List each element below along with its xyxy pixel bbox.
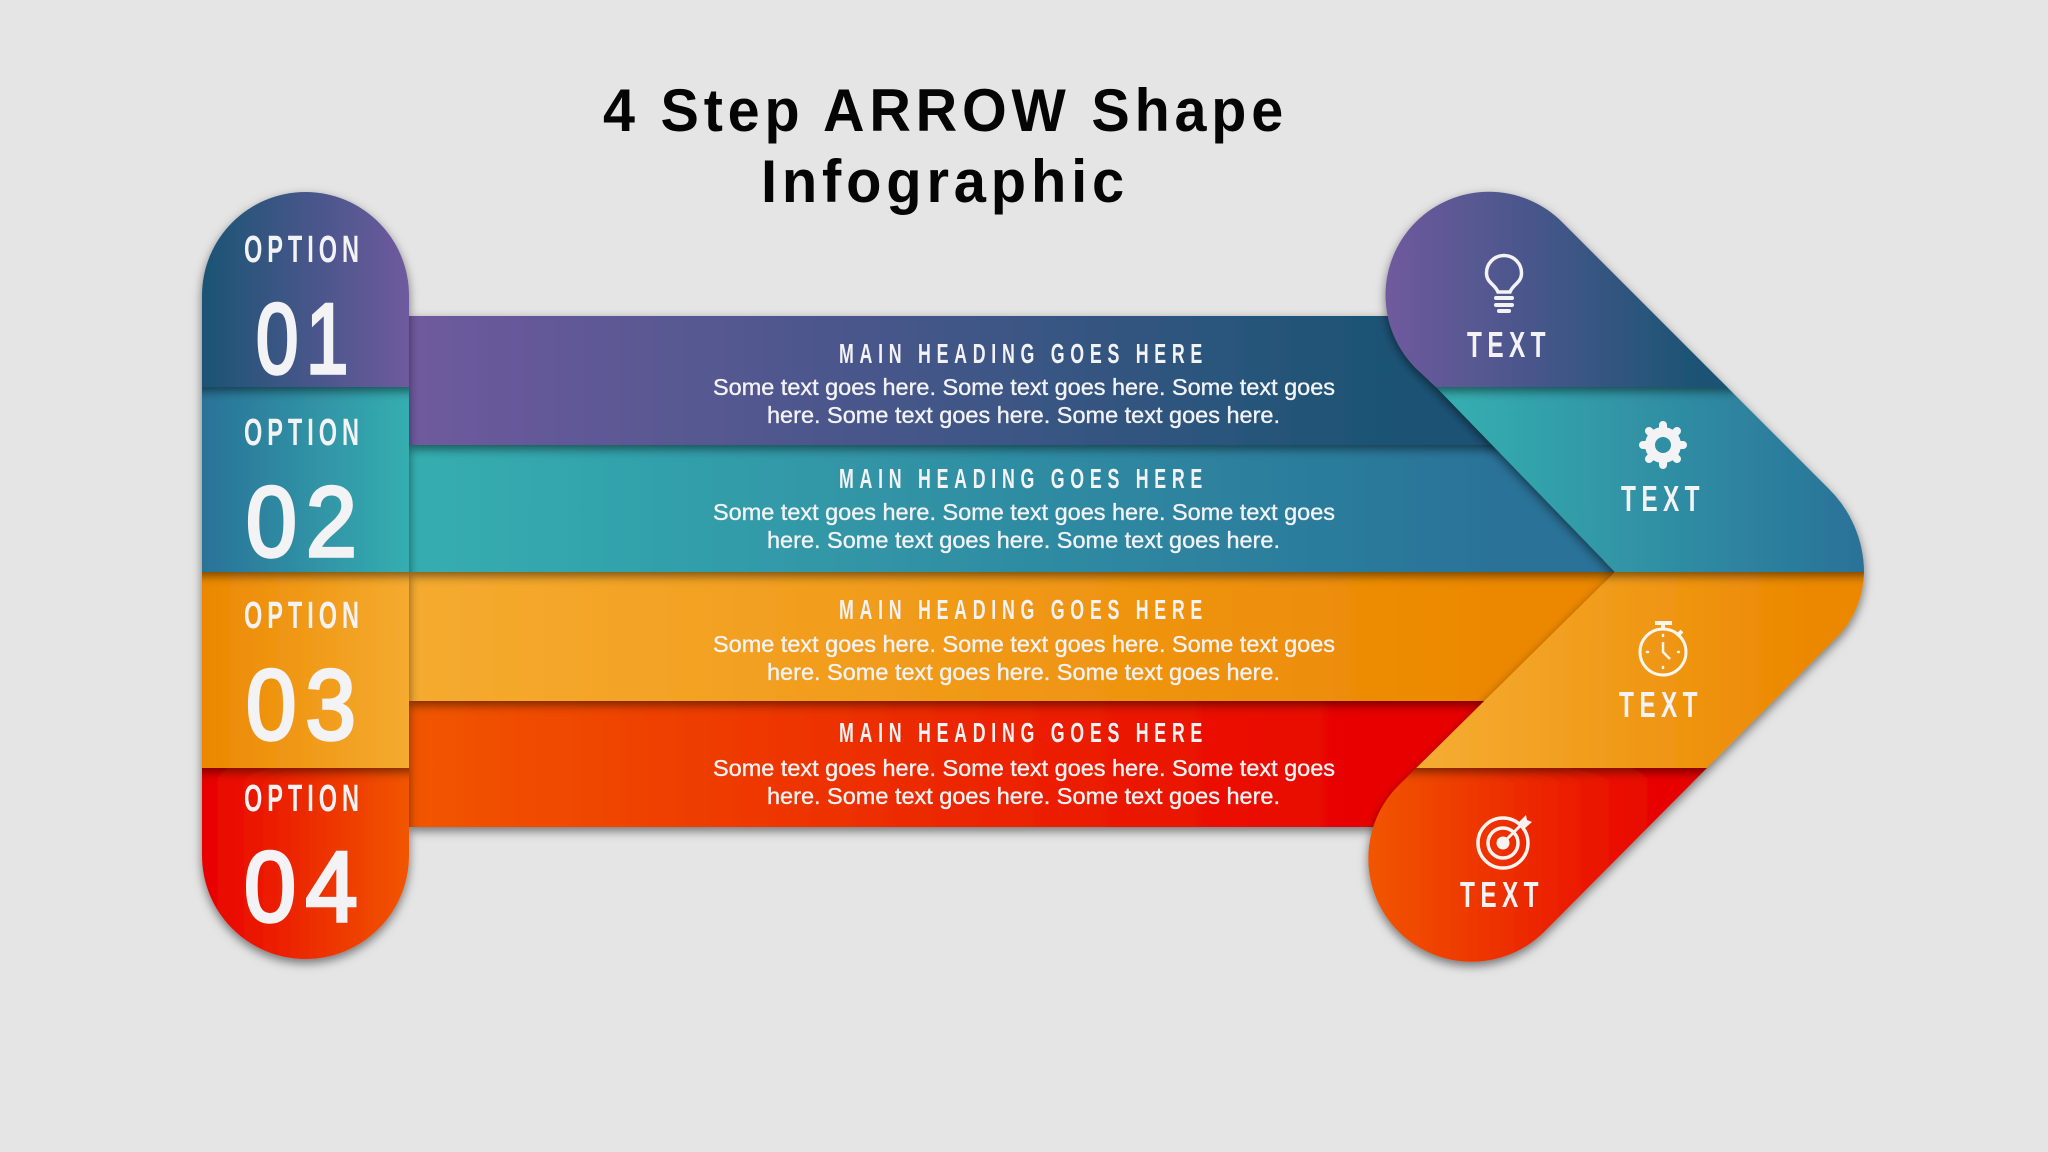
bar 3 text: Some text goes here. Some text goes here. Some text goes <box>713 631 1335 657</box>
icon: gear <box>1643 425 1683 465</box>
bar 4 text: MAIN HEADING GOES HERE <box>839 717 1208 748</box>
bar 2 text <box>713 463 1335 553</box>
bar 3 text: MAIN HEADING GOES HERE <box>839 594 1208 625</box>
bar 4 text: here. Some text goes here. Some text goes here. <box>767 783 1280 809</box>
icon: stopwatch <box>1640 623 1686 675</box>
arrow segment 4 red <box>1360 760 1720 970</box>
option labels: OPTION <box>244 412 364 454</box>
arrow label 2: TEXT <box>1621 478 1705 519</box>
pill segment 3 orange <box>195 572 416 780</box>
option numbers: 01 <box>256 283 356 394</box>
pill segment 1 purple <box>182 180 429 387</box>
option numbers: 04 <box>244 831 367 942</box>
bar 4 text <box>713 717 1335 809</box>
option labels: OPTION <box>244 595 364 637</box>
bar 3 text <box>713 594 1335 685</box>
icon: light bulb <box>1486 256 1522 311</box>
bar 1 text: Some text goes here. Some text goes here. Some text goes <box>713 374 1335 400</box>
bar 1 text: here. Some text goes here. Some text goes here. <box>767 402 1280 428</box>
arrow label 4: TEXT <box>1460 874 1544 915</box>
bar 1 text <box>713 338 1335 428</box>
title <box>603 77 1288 215</box>
bar 2 text: MAIN HEADING GOES HERE <box>839 463 1208 494</box>
bar 1 purple <box>409 316 1499 445</box>
option labels: OPTION <box>244 778 364 820</box>
title: 4 Step ARROW Shape <box>603 77 1288 144</box>
bar 4 red <box>409 690 1500 827</box>
option numbers <box>244 283 367 942</box>
bar 4 text: Some text goes here. Some text goes here. Some text goes <box>713 755 1335 781</box>
bar 1 text: MAIN HEADING GOES HERE <box>839 338 1208 369</box>
arrow label 1: TEXT <box>1467 324 1551 365</box>
bar 2 text: here. Some text goes here. Some text goes here. <box>767 527 1280 553</box>
title: Infographic <box>761 148 1129 215</box>
arrow segment 1 purple <box>1380 180 1740 387</box>
option labels: OPTION <box>244 229 364 271</box>
arrow segment 2 teal <box>1380 380 1880 572</box>
left option pill <box>195 189 416 970</box>
horizontal bars <box>409 316 1615 827</box>
pill segment 4 red <box>202 760 409 962</box>
bar 2 text: Some text goes here. Some text goes here. Some text goes <box>713 499 1335 525</box>
option labels <box>244 229 364 820</box>
arrow label 3: TEXT <box>1619 684 1703 725</box>
option numbers: 02 <box>246 466 366 577</box>
arrow head <box>1360 180 1880 970</box>
pill segment 2 teal <box>182 380 429 572</box>
option numbers: 03 <box>246 649 365 760</box>
bar 3 text: here. Some text goes here. Some text goes here. <box>767 659 1280 685</box>
arrow segment 3 orange <box>1360 560 1880 768</box>
bar 3 orange <box>409 560 1615 701</box>
icon: target with dart <box>1478 815 1532 868</box>
bar 2 teal <box>409 435 1615 572</box>
